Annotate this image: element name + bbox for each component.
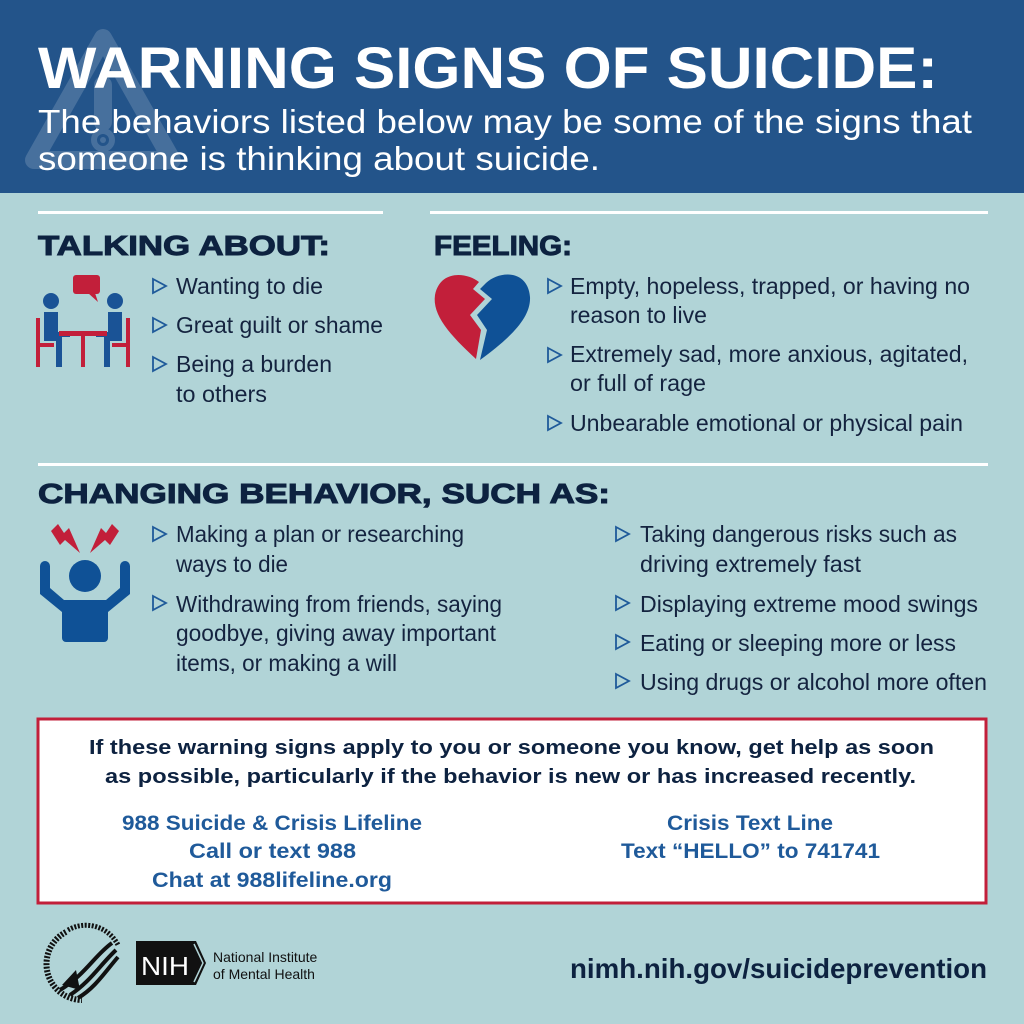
bullet list: behavior right bbox=[616, 521, 987, 695]
icon: broken heart bbox=[435, 275, 530, 360]
subtitle bbox=[38, 103, 972, 177]
bullet list: behavior left: items, or making a will bbox=[176, 650, 397, 676]
bullet list: talking: Being a burden bbox=[176, 351, 332, 377]
callout: get help box bbox=[38, 719, 986, 903]
panel: changing behavior bbox=[38, 478, 987, 695]
bullet list: feeling: or full of rage bbox=[570, 370, 706, 396]
header banner bbox=[0, 0, 1024, 193]
url: nimh.nih.gov/suicideprevention bbox=[570, 953, 987, 984]
subtitle: someone is thinking about suicide. bbox=[38, 140, 600, 177]
contact: 988 lifeline bbox=[122, 812, 422, 892]
heading: talking about: TALKING ABOUT: bbox=[38, 230, 330, 261]
bullet list: talking bbox=[153, 273, 383, 407]
contact: 988 lifeline: Chat at 988lifeline.org bbox=[152, 869, 392, 892]
contact: crisis text line bbox=[621, 812, 880, 863]
bullet list: feeling bbox=[548, 273, 970, 436]
contact: crisis text line: Crisis Text Line bbox=[667, 812, 833, 835]
bullet list: behavior right: Using drugs or alcohol more often bbox=[640, 669, 987, 695]
logo: NIH bbox=[136, 941, 317, 985]
bullet list: behavior left: Withdrawing from friends, saying bbox=[176, 591, 502, 617]
icon: distressed person bbox=[40, 524, 130, 642]
bullet list: behavior right: Displaying extreme mood swings bbox=[640, 591, 978, 617]
logo: HHS seal bbox=[46, 925, 118, 1000]
panel: talking about bbox=[36, 230, 383, 407]
icon: two people talking at table bbox=[36, 275, 130, 367]
icon: faint warning triangle bbox=[34, 38, 172, 160]
heading: changing behavior: CHANGING BEHAVIOR, SUCH AS: bbox=[38, 478, 610, 509]
subtitle: The behaviors listed below may be some of the signs that bbox=[38, 103, 972, 140]
title: WARNING SIGNS OF SUICIDE: bbox=[38, 36, 938, 101]
bullet list: talking: Wanting to die bbox=[176, 273, 323, 299]
bullet list: feeling: Extremely sad, more anxious, agitated, bbox=[570, 341, 968, 367]
logo: NIH: National Institute bbox=[213, 949, 317, 965]
contact: 988 lifeline: Call or text 988 bbox=[189, 840, 356, 863]
bullet list: behavior right: Taking dangerous risks such as bbox=[640, 521, 957, 547]
bullet list: feeling: reason to live bbox=[570, 302, 707, 328]
bullet list: behavior left bbox=[153, 521, 502, 676]
contact: 988 lifeline: 988 Suicide & Crisis Lifeline bbox=[122, 812, 422, 835]
bullet list: behavior right: Eating or sleeping more or less bbox=[640, 630, 956, 656]
bullet list: feeling: Empty, hopeless, trapped, or having no bbox=[570, 273, 970, 299]
panel: feeling bbox=[434, 230, 970, 436]
callout text: If these warning signs apply to you or someone you know, get help as soon bbox=[89, 737, 934, 759]
bullet list: behavior left: ways to die bbox=[175, 551, 288, 577]
heading: feeling: FEELING: bbox=[434, 230, 572, 261]
bullet list: behavior left: goodbye, giving away important bbox=[176, 620, 497, 646]
bullet list: behavior left: Making a plan or researching bbox=[176, 521, 464, 547]
bullet list: behavior right: driving extremely fast bbox=[640, 551, 862, 577]
bullet list: talking: Great guilt or shame bbox=[176, 312, 383, 338]
callout text: as possible, particularly if the behavior is new or has increased recently. bbox=[105, 766, 916, 788]
logo: NIH: of Mental Health bbox=[213, 966, 315, 982]
bullet list: talking: to others bbox=[176, 381, 267, 407]
callout text bbox=[89, 737, 934, 788]
contact: crisis text line: Text “HELLO” to 741741 bbox=[621, 840, 880, 863]
bullet list: feeling: Unbearable emotional or physical pain bbox=[570, 410, 963, 436]
logo: NIH: NIH bbox=[141, 951, 189, 981]
